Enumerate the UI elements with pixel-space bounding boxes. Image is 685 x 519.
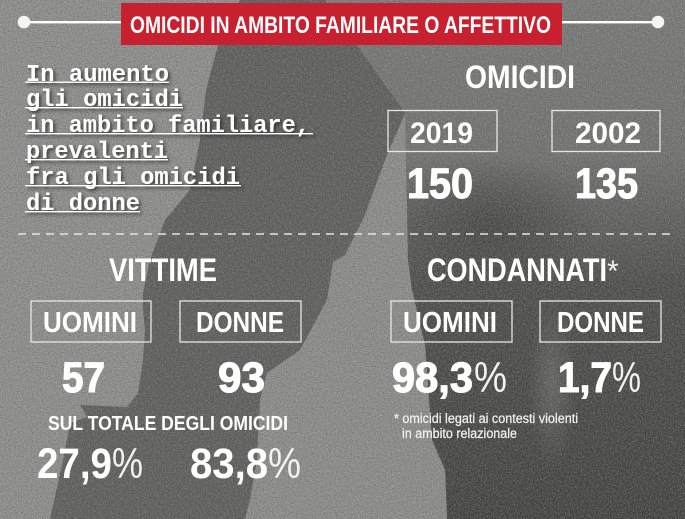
value: 98,3%: % bbox=[474, 354, 507, 402]
value: 150: 150 bbox=[407, 160, 473, 208]
box: vittime donne: DONNE bbox=[196, 307, 284, 339]
value: 83,8%: 83,8 bbox=[190, 440, 268, 488]
title banner bbox=[121, 3, 562, 45]
intro statement: prevalenti bbox=[26, 139, 168, 166]
value: 135: 135 bbox=[575, 160, 638, 208]
value: 83,8%: % bbox=[268, 440, 301, 488]
dashed divider bbox=[18, 233, 670, 235]
year box: 2002: 2002 bbox=[575, 117, 641, 150]
box: condannati uomini bbox=[391, 301, 512, 342]
value: 27,9%: % bbox=[112, 440, 143, 488]
box: vittime donne bbox=[180, 301, 301, 342]
box: condannati donne: DONNE bbox=[557, 307, 644, 339]
value: 1,7%: % bbox=[612, 354, 641, 402]
left connector line with dot bbox=[18, 16, 121, 28]
intro statement: di donne bbox=[26, 191, 140, 218]
box: condannati uomini: UOMINI bbox=[403, 307, 497, 339]
footnote bbox=[394, 411, 578, 441]
box: vittime uomini: UOMINI bbox=[43, 307, 137, 339]
value: 57: 57 bbox=[62, 354, 105, 402]
intro statement: gli omicidi bbox=[26, 87, 183, 114]
year box: 2002 bbox=[552, 110, 660, 152]
intro statement bbox=[25, 62, 313, 218]
value: 93: 93 bbox=[218, 354, 265, 402]
footnote: in ambito relazionale bbox=[402, 426, 517, 441]
heading: condannati: CONDANNATI bbox=[427, 252, 607, 288]
heading: condannati: * bbox=[607, 255, 619, 288]
box: vittime uomini bbox=[31, 301, 151, 342]
value: 1,7%: 1,7 bbox=[558, 354, 612, 402]
year box: 2019: 2019 bbox=[410, 117, 473, 150]
box: condannati donne bbox=[540, 301, 661, 342]
intro statement: In aumento bbox=[26, 62, 169, 89]
footnote: * omicidi legati ai contesti violenti bbox=[394, 411, 578, 426]
year box: 2019 bbox=[388, 110, 497, 152]
right connector line with dot bbox=[562, 16, 664, 28]
heading: vittime: VITTIME bbox=[109, 252, 217, 288]
intro statement: fra gli omicidi bbox=[26, 165, 240, 192]
intro statement: in ambito familiare, bbox=[26, 113, 310, 140]
heading: omicidi: OMICIDI bbox=[465, 59, 575, 95]
value: 27,9%: 27,9 bbox=[37, 440, 112, 488]
title banner: OMICIDI IN AMBITO FAMILIARE O AFFETTIVO bbox=[130, 12, 551, 39]
subheading: sul totale degli omicidi: SUL TOTALE DEGLI OMICIDI bbox=[48, 413, 288, 435]
value: 98,3%: 98,3 bbox=[392, 354, 473, 402]
